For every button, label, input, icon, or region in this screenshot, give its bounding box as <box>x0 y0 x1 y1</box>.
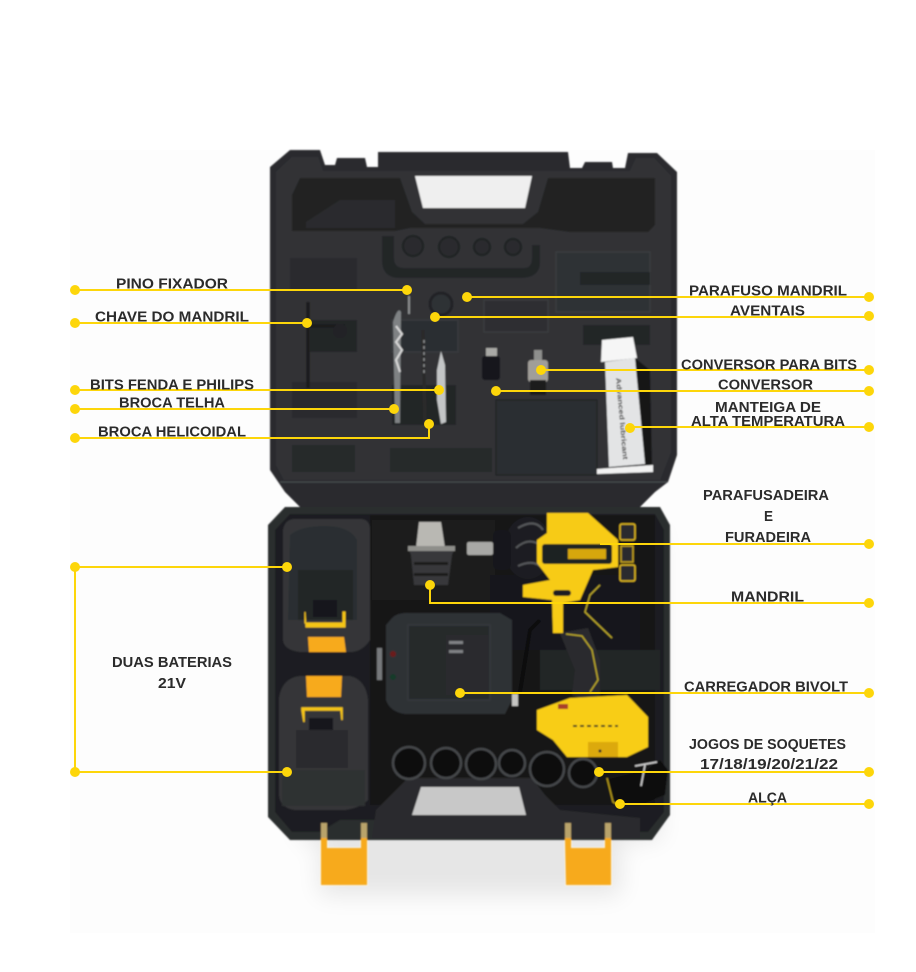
callout: pino fixador <box>70 276 412 295</box>
latch left <box>321 823 367 885</box>
callout: conversor: CONVERSOR <box>718 378 814 394</box>
callout: parafusadeira e furadeira: FURADEIRA <box>725 530 812 546</box>
callout: parafuso mandril <box>462 284 874 302</box>
callout: alça <box>615 790 874 809</box>
accessory: pino fixador <box>408 296 410 314</box>
callout: parafusadeira e furadeira: E <box>764 509 773 525</box>
photo: open tool case <box>268 150 677 895</box>
callout: conversor para bits <box>536 358 874 375</box>
callout: carregador bivolt: CARREGADOR BIVOLT <box>684 680 848 696</box>
callout: carregador bivolt <box>455 680 874 698</box>
callout: chave do mandril <box>70 310 312 328</box>
callout: conversor para bits: CONVERSOR PARA BITS <box>681 358 857 374</box>
drill <box>467 513 648 757</box>
callout: parafusadeira e furadeira: PARAFUSADEIRA <box>703 488 830 504</box>
callout: broca helicoidal: BROCA HELICOIDAL <box>98 424 246 440</box>
latch right <box>565 823 611 885</box>
mandril <box>408 522 455 585</box>
callout: conversor <box>491 378 874 396</box>
accessory: converters <box>482 348 548 395</box>
callout: pino fixador: PINO FIXADOR <box>116 276 229 292</box>
callout: jogos de soquetes: JOGOS DE SOQUETES <box>689 737 846 753</box>
callout: manteiga de alta temperatura: ALTA TEMPERATURA <box>691 414 846 430</box>
charger <box>377 613 540 714</box>
callout: broca helicoidal <box>70 419 434 443</box>
battery: upper <box>283 519 370 652</box>
accessory: grease tube <box>597 337 653 474</box>
callout: mandril: MANDRIL <box>731 590 804 606</box>
callout: broca telha <box>70 396 399 414</box>
callout: jogos de soquetes <box>594 737 874 777</box>
callout: aventais <box>430 304 874 322</box>
callout: jogos de soquetes: 17/18/19/20/21/22 <box>700 757 838 773</box>
callout: aventais: AVENTAIS <box>730 304 805 320</box>
accessory: drill bits <box>393 310 446 424</box>
callout: duas baterias bracket: 21V <box>158 676 186 692</box>
panel: upper case lid <box>270 150 677 507</box>
callout: chave do mandril: CHAVE DO MANDRIL <box>95 310 249 326</box>
callout: parafuso mandril: PARAFUSO MANDRIL <box>689 284 847 300</box>
callout: bits fenda e philips <box>70 378 444 395</box>
callout: manteiga de alta temperatura: MANTEIGA DE <box>715 400 821 416</box>
accessory: chave do mandril <box>308 302 347 388</box>
panel: lower case base <box>268 507 670 885</box>
strap and T-key <box>605 760 668 806</box>
callout: parafusadeira e furadeira <box>600 488 874 549</box>
callout: broca telha: BROCA TELHA <box>119 396 226 412</box>
handle opening <box>292 178 655 232</box>
recesses <box>290 258 357 290</box>
callout: bits fenda e philips: BITS FENDA E PHILIPS <box>90 378 254 394</box>
callout: duas baterias bracket: DUAS BATERIAS <box>112 655 232 671</box>
callout: manteiga de alta temperatura <box>625 400 874 433</box>
bottom handle <box>372 778 640 838</box>
socket tray <box>382 236 540 278</box>
callout: mandril <box>425 580 874 608</box>
callout: alça: ALÇA <box>748 790 788 806</box>
callout: duas baterias bracket <box>70 562 292 777</box>
callouts <box>70 276 874 809</box>
accessory: grease tube: Advanced lubricant <box>614 378 628 461</box>
battery: lower <box>279 676 368 810</box>
accessory: aventais ring <box>430 293 452 315</box>
sockets <box>393 747 597 787</box>
